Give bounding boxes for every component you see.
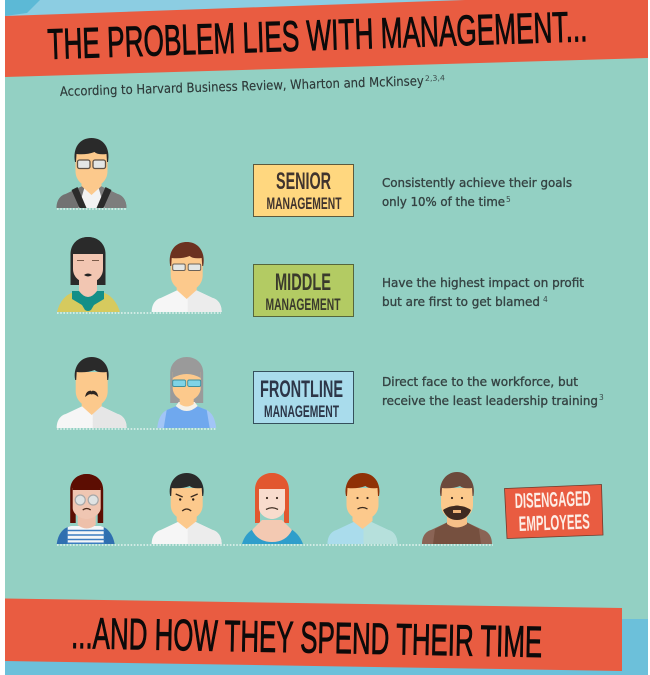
label: frontline management: MANAGEMENT xyxy=(264,402,339,421)
text: middle description: but are first to get blamed xyxy=(382,295,540,309)
text: middle description: 4 xyxy=(543,295,548,304)
person: disengaged bearded man xyxy=(422,472,492,544)
label: middle management: MIDDLE xyxy=(275,269,331,296)
label: frontline management: FRONTLINE xyxy=(260,376,343,403)
text: senior description: Consistently achieve their goals xyxy=(382,176,572,190)
text: frontline description xyxy=(382,375,604,408)
text: senior description: 5 xyxy=(506,195,511,204)
subtitle: According to Harvard Business Review, Wharton and McKinsey xyxy=(60,74,424,100)
text: frontline description: receive the least leadership training xyxy=(382,394,598,408)
label: disengaged employees: EMPLOYEES xyxy=(518,511,590,536)
label: senior management: MANAGEMENT xyxy=(266,194,342,213)
footer banner xyxy=(5,598,622,671)
text: middle description: Have the highest impact on profit xyxy=(382,276,584,290)
text: frontline description: Direct face to the workforce, but xyxy=(382,375,578,389)
text: senior description: only 10% of the time xyxy=(382,195,505,209)
label: middle management: MANAGEMENT xyxy=(266,295,341,314)
text: middle description xyxy=(382,276,584,309)
label: middle management xyxy=(254,264,354,316)
label: senior management: SENIOR xyxy=(276,168,331,195)
person: middle manager man xyxy=(152,242,222,312)
person: frontline manager grey-haired woman xyxy=(157,357,216,428)
label: frontline management xyxy=(254,372,354,424)
text: senior description xyxy=(382,176,572,209)
text: frontline description: 3 xyxy=(599,393,604,402)
person: frontline manager man with moustache xyxy=(57,357,127,428)
person: disengaged woman with round glasses xyxy=(57,474,115,544)
person: disengaged man, angry xyxy=(152,473,222,544)
label: disengaged employees xyxy=(504,484,603,538)
person: disengaged man in light blue xyxy=(328,473,398,544)
label: senior management xyxy=(254,164,354,216)
subtitle: 2,3,4 xyxy=(425,73,445,83)
person: disengaged red-haired woman xyxy=(242,473,303,544)
person: middle manager woman xyxy=(57,237,120,312)
person: senior manager with glasses and jacket xyxy=(56,138,126,208)
header banner xyxy=(5,0,648,77)
